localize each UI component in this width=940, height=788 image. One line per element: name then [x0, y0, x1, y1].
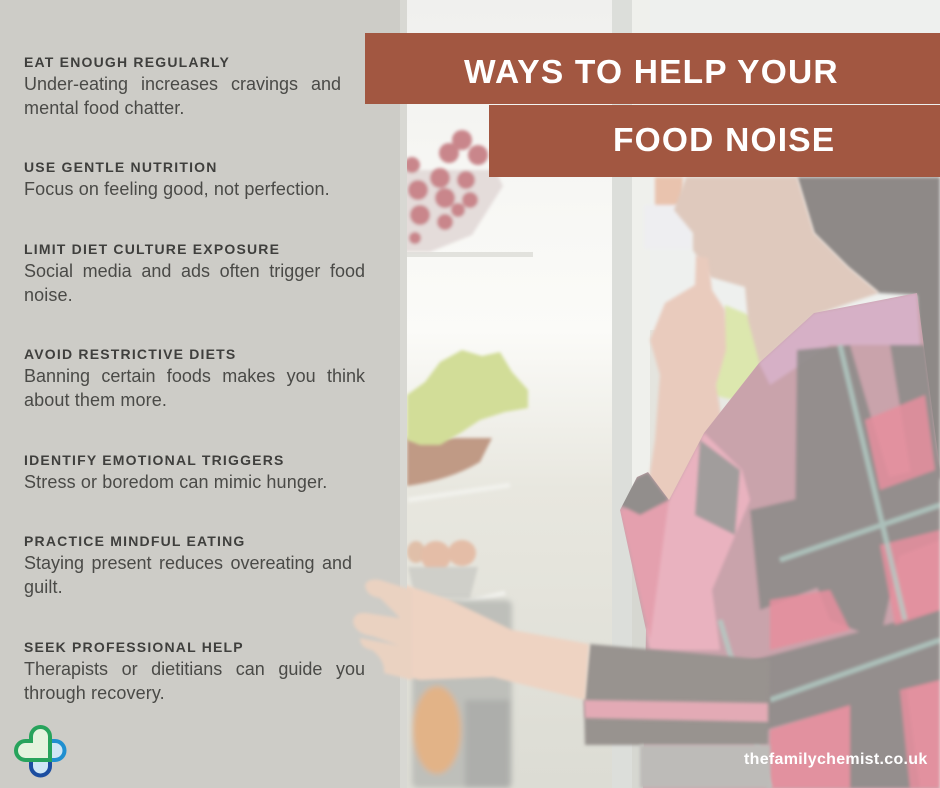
tip: seek professional help: through recovery. — [24, 683, 165, 703]
woman's hair — [797, 177, 940, 480]
tip: seek professional help — [24, 639, 365, 703]
fridge shelves — [408, 485, 510, 606]
website url: thefamilychemist.co.uk — [744, 751, 928, 768]
icon: medical cross logo — [14, 725, 66, 778]
tip: limit diet culture exposure: LIMIT DIET CULTURE EXPOSURE — [24, 241, 280, 257]
tip: avoid restrictive diets: AVOID RESTRICTIVE DIETS — [24, 346, 236, 362]
lower door bin with orange — [412, 600, 512, 788]
tip: practice mindful eating: PRACTICE MINDFUL EATING — [24, 533, 246, 549]
title band: second line — [489, 105, 940, 177]
tip: identify emotional triggers — [24, 452, 327, 492]
left door panel — [0, 0, 402, 788]
tip: seek professional help: SEEK PROFESSIONAL HELP — [24, 639, 244, 655]
tip: eat enough regularly — [24, 54, 341, 118]
tip: limit diet culture exposure: noise. — [24, 285, 73, 305]
woman's face and neck — [674, 177, 879, 365]
tip: practice mindful eating: Staying present reduces overeating and — [24, 553, 352, 573]
tip: eat enough regularly: Under-eating increases cravings and — [24, 74, 341, 94]
tip: identify emotional triggers: IDENTIFY EMOTIONAL TRIGGERS — [24, 452, 285, 468]
lower shirt body below cuff — [640, 745, 770, 788]
tip: limit diet culture exposure — [24, 241, 365, 305]
tip: use gentle nutrition — [24, 159, 330, 199]
tip: avoid restrictive diets: Banning certain foods makes you think — [24, 366, 365, 386]
tip: limit diet culture exposure: Social media and ads often trigger food — [24, 261, 365, 281]
lettuce behind arm — [712, 305, 785, 400]
tip: identify emotional triggers: Stress or boredom can mimic hunger. — [24, 472, 327, 492]
eggs and carton — [407, 540, 478, 598]
title line 1: WAYS TO HELP YOUR — [464, 54, 839, 91]
tip: use gentle nutrition: Focus on feeling good, not perfection. — [24, 179, 330, 199]
title line 2: FOOD NOISE — [613, 122, 835, 159]
tip: use gentle nutrition: USE GENTLE NUTRITION — [24, 159, 218, 175]
grapes in bowl — [404, 130, 503, 252]
hand fingers over panel — [353, 580, 412, 680]
tip: avoid restrictive diets: about them more. — [24, 390, 167, 410]
title band: first line — [365, 33, 940, 104]
tip: eat enough regularly: mental food chatter. — [24, 98, 184, 118]
left text panel — [24, 54, 365, 703]
tip: practice mindful eating — [24, 533, 352, 597]
plaid shirt — [600, 280, 940, 788]
raised arm and hand — [645, 256, 726, 510]
tip: avoid restrictive diets — [24, 346, 365, 410]
tip: seek professional help: Therapists or dietitians can guide you — [24, 659, 365, 679]
fridge interior — [400, 0, 940, 788]
lettuce bowl — [407, 350, 528, 486]
door label and carrots — [644, 177, 692, 249]
forearm and hand on door — [400, 583, 589, 700]
tip: eat enough regularly: EAT ENOUGH REGULARLY — [24, 54, 230, 70]
tip: practice mindful eating: guilt. — [24, 577, 63, 597]
shirt cuff — [584, 644, 770, 745]
